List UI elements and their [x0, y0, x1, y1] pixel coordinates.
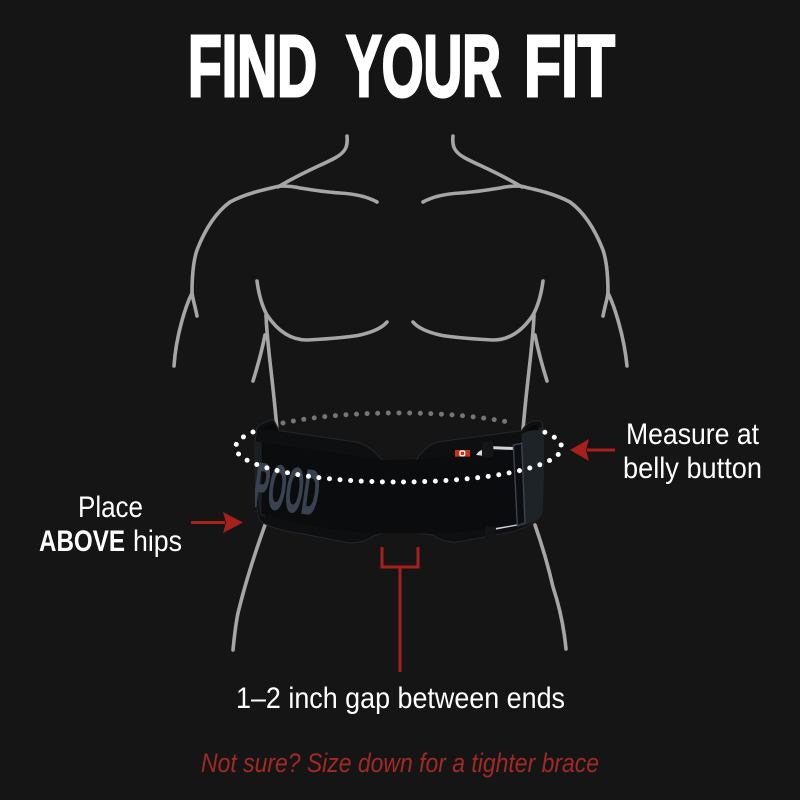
weightlifting belt: POOD: [249, 451, 324, 529]
label: place above hips: ABOVE: [39, 525, 125, 558]
label: gap between ends: 1–2 inch gap between ends: [236, 682, 565, 715]
belt bottom keeper: [485, 527, 496, 538]
label: place above hips: hips: [133, 525, 182, 558]
label: measure at belly button: belly button: [623, 452, 762, 485]
left side of torso: [174, 136, 387, 650]
front of ellipse: [236, 432, 562, 482]
footnote: Not sure? Size down for a tighter brace: [201, 748, 599, 778]
belt right pad: [417, 421, 544, 542]
belt left end panel: [255, 442, 265, 517]
dotted measuring ellipse: [236, 413, 562, 482]
arrow: place above hips: [191, 512, 243, 533]
belt red tag: [455, 450, 487, 457]
back of ellipse: [283, 413, 513, 423]
arrow: measure at belly button: [570, 439, 615, 461]
belt right end panel: [522, 427, 544, 526]
title: [188, 18, 615, 115]
belt end tab: [513, 443, 525, 526]
belt left pad: [255, 419, 382, 543]
right side of torso: [413, 136, 627, 649]
belt inner rims: [262, 423, 539, 431]
label: place above hips: [39, 491, 182, 558]
title: FIND: [188, 18, 317, 115]
weightlifting belt: [249, 419, 544, 543]
label: measure at belly button: Measure at: [626, 418, 760, 451]
belt top keeper: [482, 441, 493, 457]
belt silver buckle: [492, 448, 517, 528]
label: place above hips: Place: [78, 491, 143, 524]
title: FIT: [524, 18, 615, 115]
belt strap: [262, 443, 519, 533]
label: measure at belly button: [623, 418, 762, 485]
body outline: [174, 136, 627, 650]
title: YOUR: [346, 18, 501, 115]
bracket: gap between ends: [382, 547, 418, 672]
